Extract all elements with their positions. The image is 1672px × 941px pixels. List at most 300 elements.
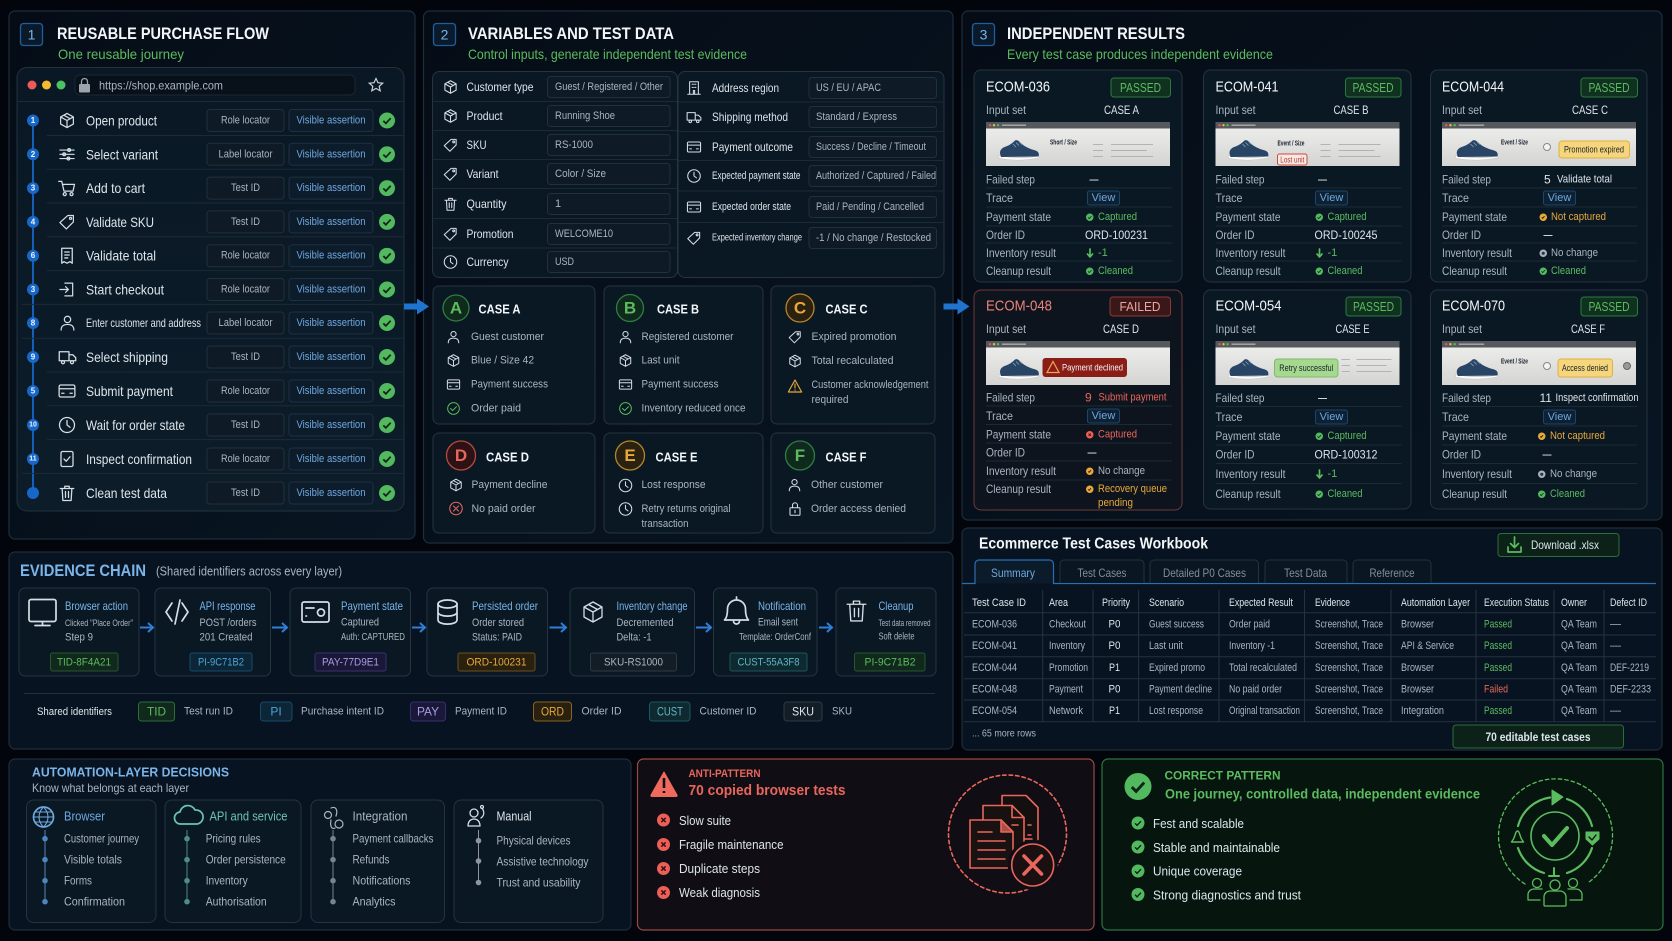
- result card ECOM-041: Failed step: [1216, 172, 1265, 186]
- case card A: Blue / Size 42: [471, 354, 534, 366]
- step 11 inspect confirmation: Visible assertion: [296, 453, 366, 465]
- evidence: api response: API response: [200, 599, 256, 613]
- panel: ecommerce test cases workbook: [962, 528, 1662, 750]
- layer: manual: Assistive technology: [496, 854, 588, 868]
- step 10 wait for order state: 10: [29, 422, 37, 428]
- table row ECOM-041: ECOM-041: [972, 640, 1017, 652]
- step 12 clean test data: Visible assertion: [296, 487, 366, 499]
- table row ECOM-048: Browser: [1401, 684, 1434, 696]
- case card A: A: [450, 298, 462, 318]
- variable: expected payment state: [688, 166, 936, 186]
- variable: variant: Variant: [466, 167, 499, 181]
- result card ECOM-044: Input set: [1442, 103, 1483, 117]
- evidence: cleanup: [836, 588, 936, 676]
- layer: browser: Forms: [64, 874, 92, 888]
- result card ECOM-044: —: [1544, 230, 1552, 240]
- result card ECOM-048 failed: Payment declined: [1062, 362, 1123, 372]
- case card A: [433, 286, 595, 424]
- variables table left: [432, 72, 678, 278]
- variable: expected payment state: Expected payment state: [712, 170, 800, 182]
- table row ECOM-054: Network: [1049, 705, 1083, 717]
- icon: copied documents with cross: [948, 775, 1066, 893]
- anti-pattern label: ANTI-PATTERN: [688, 768, 761, 780]
- result card ECOM-054: CASE E: [1336, 322, 1370, 336]
- table row ECOM-036: —: [1610, 618, 1621, 630]
- result card ECOM-036: Order ID: [986, 228, 1025, 242]
- variable: expected inventory change: Expected inventory change: [712, 232, 802, 244]
- table row ECOM-054: Original transaction: [1229, 705, 1300, 717]
- result card ECOM-054: Failed step: [1216, 391, 1265, 405]
- result card ECOM-036: Captured: [1098, 211, 1137, 223]
- workbook tabs: Reference: [1370, 566, 1415, 580]
- step 9 submit payment: Role locator: [221, 385, 270, 397]
- table row ECOM-041: Screenshot, Trace: [1315, 640, 1383, 652]
- subheading: One reusable journey: [58, 46, 184, 62]
- result card ECOM-044: Event / Size: [1501, 140, 1528, 146]
- result card ECOM-054: Captured: [1328, 430, 1366, 442]
- workbook tabs: Detailed P0 Cases: [1163, 566, 1246, 580]
- table row ECOM-048: DEF-2233: [1610, 684, 1651, 696]
- table header: Owner: [1561, 597, 1587, 609]
- result card ECOM-070: Trace: [1442, 410, 1469, 424]
- heading: reusable purchase flow: REUSABLE PURCHASE FLOW: [57, 24, 270, 43]
- result card ECOM-041: CASE B: [1334, 103, 1368, 117]
- step 8 select shipping: Visible assertion: [296, 351, 366, 363]
- result card ECOM-054: Trace: [1216, 410, 1243, 424]
- step 2 select variant: Label locator: [218, 148, 273, 160]
- layer: integration: Payment callbacks: [352, 832, 434, 846]
- evidence: api response: [155, 588, 270, 676]
- case card A: Guest customer: [471, 331, 544, 343]
- case card D: D: [455, 446, 467, 465]
- step 11 inspect confirmation: [27, 448, 395, 470]
- step 12 clean test data: [27, 482, 395, 504]
- variable: product: Product: [466, 109, 503, 123]
- result card ECOM-048 failed: Captured: [1098, 428, 1137, 440]
- step 9 submit payment: [27, 380, 395, 402]
- step 11 inspect confirmation: 11: [29, 456, 37, 462]
- variable: expected order state: Paid / Pending / Cancelled: [816, 201, 924, 213]
- case card E: Retry returns original: [642, 503, 730, 515]
- result card ECOM-070: Cleaned: [1550, 488, 1585, 500]
- step 2 select variant: 2: [31, 150, 36, 159]
- variable: variant: Color / Size: [555, 168, 606, 180]
- heading: independent results: INDEPENDENT RESULTS: [1007, 24, 1185, 43]
- case card B: CASE B: [657, 302, 699, 316]
- variable: address region: [688, 78, 936, 98]
- result card ECOM-048 failed: Input set: [986, 322, 1027, 336]
- step 10 wait for order state: Test ID: [231, 419, 260, 431]
- variable: sku: [444, 134, 670, 156]
- step 3 add to cart: [27, 177, 395, 199]
- result card ECOM-036: Trace: [986, 191, 1013, 205]
- evidence: persisted order: Persisted order: [472, 599, 538, 613]
- automation heading: AUTOMATION-LAYER DECISIONS: [32, 764, 229, 780]
- anti-pattern list: Duplicate steps: [679, 861, 760, 876]
- result card ECOM-036: Cleaned: [1098, 265, 1133, 277]
- case card E: [604, 433, 763, 533]
- result card ECOM-070: Cleanup result: [1442, 487, 1508, 501]
- evidence: cleanup: Cleanup: [878, 599, 914, 613]
- result card ECOM-041: Order ID: [1216, 228, 1255, 242]
- layer: browser: Confirmation: [64, 895, 125, 909]
- result card ECOM-054: PASSED: [1353, 299, 1394, 314]
- evidence: notification: CUST-55A3F8: [738, 656, 800, 668]
- evidence: inventory change: Delta: -1: [616, 632, 652, 644]
- table row ECOM-048: No paid order: [1229, 684, 1282, 696]
- step 11 inspect confirmation: Inspect confirmation: [86, 451, 192, 467]
- result card ECOM-048 failed: No change: [1098, 465, 1145, 477]
- evidence: browser action: TID-8F4A21: [57, 656, 111, 668]
- table row ECOM-041: [972, 640, 1621, 652]
- evidence: browser action: Clicked "Place Order": [65, 618, 133, 628]
- result card ECOM-041: Payment state: [1216, 210, 1281, 224]
- layer: browser: Browser: [64, 808, 106, 824]
- table row ECOM-044: DEF-2219: [1610, 662, 1649, 674]
- result card ECOM-070: No change: [1550, 468, 1597, 480]
- variable: payment outcome: Payment outcome: [712, 140, 793, 154]
- evidence: payment state: [290, 588, 410, 676]
- step 10 wait for order state: [27, 414, 395, 436]
- step 2 select variant: Visible assertion: [296, 148, 366, 160]
- table row ECOM-041: P0: [1108, 640, 1120, 652]
- step 1 open product: Open product: [86, 112, 157, 128]
- step 8 select shipping: [27, 346, 395, 368]
- table row ECOM-044: P1: [1109, 662, 1120, 674]
- shared identifiers legend: Order ID: [582, 706, 622, 718]
- table header: Scenario: [1149, 597, 1184, 609]
- step 4 validate sku: Test ID: [231, 216, 260, 228]
- result card ECOM-044: 5: [1544, 172, 1551, 186]
- variable: currency: USD: [555, 256, 574, 268]
- section number badge 2: [434, 24, 456, 46]
- table header: Expected Result: [1229, 597, 1293, 609]
- result card ECOM-036: ORD-100231: [1085, 228, 1148, 242]
- table row ECOM-041: Passed: [1484, 640, 1512, 652]
- table row ECOM-048: P0: [1108, 684, 1120, 696]
- result card ECOM-041: Lost unit: [1280, 156, 1305, 164]
- result card ECOM-036: CASE A: [1104, 103, 1139, 117]
- shared identifiers legend: CUST: [657, 704, 684, 718]
- evidence: browser action: [19, 588, 139, 676]
- step 4 validate sku: Visible assertion: [296, 216, 366, 228]
- variable: payment outcome: [687, 136, 936, 158]
- shared identifiers legend: ORD: [541, 704, 564, 718]
- result card ECOM-070: ECOM-070: [1442, 298, 1505, 314]
- table row ECOM-036: Checkout: [1049, 618, 1086, 630]
- step 3 add to cart: Test ID: [231, 182, 260, 194]
- evidence: inventory change: SKU-RS1000: [604, 656, 663, 668]
- result card ECOM-041: Event / Size: [1278, 140, 1305, 148]
- variable: product: [445, 106, 670, 126]
- case card B: [604, 286, 763, 424]
- layer: manual: Physical devices: [496, 834, 570, 848]
- step 4 validate sku: Validate SKU: [86, 214, 154, 230]
- heading: evidence chain: EVIDENCE CHAIN: [20, 561, 146, 580]
- step 6 start checkout: Role locator: [221, 284, 270, 296]
- result card ECOM-044: Payment state: [1442, 210, 1507, 224]
- shared identifiers legend: TID: [147, 704, 166, 718]
- evidence: notification: [714, 588, 817, 676]
- table row ECOM-044: [972, 662, 1649, 674]
- step 8 select shipping: Select shipping: [86, 349, 168, 365]
- section number badge 2: 2: [441, 26, 449, 42]
- table row ECOM-054: —: [1610, 705, 1621, 717]
- result card ECOM-036: Short / Size: [1050, 140, 1077, 146]
- layer: browser: [26, 800, 156, 922]
- result card ECOM-070: Order ID: [1442, 448, 1481, 462]
- layer: integration: Notifications: [352, 874, 410, 888]
- evidence: payment state: Auth: CAPTURED: [341, 632, 405, 643]
- section number badge 3: [972, 24, 994, 46]
- case card F: Other customer: [811, 479, 883, 491]
- shared identifiers legend: SKU: [792, 704, 814, 718]
- layer: api and service: [165, 800, 301, 922]
- result card ECOM-044: CASE C: [1572, 103, 1608, 117]
- table row ECOM-048: [972, 684, 1651, 696]
- step 7 enter customer and address: [27, 312, 395, 334]
- panel: evidence chain: [9, 552, 953, 749]
- layer: api and service: Order persistence: [206, 853, 286, 867]
- evidence: api response: 201 Created: [200, 632, 252, 644]
- variable: currency: [444, 252, 670, 272]
- result card ECOM-041: ORD-100245: [1314, 228, 1378, 242]
- shared identifiers legend: Test run ID: [184, 706, 233, 718]
- result card ECOM-048 failed: Order ID: [986, 446, 1025, 460]
- step 10 wait for order state: Wait for order state: [86, 417, 185, 433]
- editable test cases button: 70 editable test cases: [1486, 730, 1591, 744]
- result card ECOM-048 failed: Failed step: [986, 390, 1035, 404]
- step 6 start checkout: 3: [31, 285, 36, 294]
- result card ECOM-054: Inventory result: [1216, 467, 1286, 481]
- layer: api and service: Inventory: [206, 874, 248, 888]
- table row ECOM-054: Integration: [1401, 705, 1444, 717]
- result card ECOM-048 failed: 9: [1085, 390, 1092, 404]
- result card ECOM-041: Cleaned: [1328, 265, 1362, 277]
- anti-pattern headline: 70 copied browser tests: [688, 782, 846, 799]
- panel 3: independent results: [962, 11, 1662, 520]
- shared identifiers legend: Customer ID: [700, 706, 757, 718]
- table row ECOM-041: QA Team: [1561, 640, 1597, 652]
- step 3 add to cart: Visible assertion: [296, 182, 366, 194]
- table row ECOM-041: Inventory -1: [1229, 640, 1275, 652]
- workbook tabs: Test Data: [1284, 566, 1327, 580]
- result card ECOM-070: Access denied: [1562, 363, 1608, 373]
- table row ECOM-054: Lost response: [1149, 705, 1203, 717]
- table row ECOM-036: Guest success: [1149, 618, 1204, 630]
- download button: [1498, 534, 1619, 556]
- case card D: Payment decline: [472, 479, 548, 491]
- step 8 select shipping: Test ID: [231, 351, 260, 363]
- step 5 validate total: Role locator: [221, 250, 270, 262]
- variable: expected payment state: Authorized / Captured / Failed: [816, 170, 936, 182]
- variable: sku: RS-1000: [555, 139, 593, 151]
- result card ECOM-044: Trace: [1442, 191, 1469, 205]
- correct pattern list: Unique coverage: [1153, 864, 1242, 878]
- table row ECOM-048: Payment decline: [1149, 684, 1212, 696]
- result card ECOM-048 failed: ECOM-048: [986, 298, 1052, 314]
- result card ECOM-041: Cleanup result: [1216, 264, 1281, 278]
- step 5 validate total: 6: [31, 251, 36, 260]
- table row ECOM-048: Payment: [1049, 684, 1083, 696]
- evidence: persisted order: Status: PAID: [472, 632, 522, 644]
- table row ECOM-044: QA Team: [1561, 662, 1597, 674]
- step 4 validate sku: 4: [31, 217, 36, 226]
- result card ECOM-041: ECOM-041: [1216, 78, 1278, 96]
- case card F: Order access denied: [811, 503, 906, 515]
- shared identifiers legend: PAY: [417, 704, 439, 718]
- result card ECOM-044: Inventory result: [1442, 246, 1513, 260]
- section number badge 3: 3: [980, 26, 988, 42]
- table row ECOM-036: Order paid: [1229, 618, 1270, 630]
- table header: Automation Layer: [1401, 597, 1470, 609]
- layer: manual: Trust and usability: [496, 876, 580, 890]
- case card C: Expired promotion: [812, 331, 896, 343]
- result card ECOM-041: [1204, 70, 1411, 282]
- result card ECOM-044: Promotion expired: [1564, 144, 1624, 154]
- evidence: payment state: Payment state: [341, 599, 403, 613]
- workbook tabs: Test Cases: [1078, 566, 1126, 580]
- result card ECOM-070: Payment state: [1442, 429, 1507, 443]
- variable: address region: Address region: [712, 81, 779, 95]
- result card ECOM-041: Input set: [1216, 103, 1256, 117]
- result card ECOM-036: -1: [1098, 247, 1108, 259]
- result card ECOM-036: View: [1092, 192, 1115, 204]
- table row ECOM-036: [972, 618, 1621, 630]
- layer: browser: Visible totals: [64, 853, 122, 867]
- correct pattern list: Strong diagnostics and trust: [1153, 888, 1301, 902]
- editable test cases button: [1453, 725, 1624, 748]
- result card ECOM-048 failed: FAILED: [1120, 299, 1160, 314]
- browser window: [17, 68, 404, 511]
- correct pattern list: Fest and scalable: [1153, 816, 1244, 831]
- variable: customer type: Guest / Registered / Other: [555, 81, 663, 93]
- variable: shipping method: Standard / Express: [816, 111, 897, 123]
- result card ECOM-036: —: [1090, 174, 1098, 184]
- evidence: persisted order: [427, 588, 548, 676]
- browser chrome: https://shop.example.com: [99, 78, 223, 92]
- case card C: Total recalculated: [812, 355, 894, 367]
- result card ECOM-036: Cleanup result: [986, 264, 1052, 278]
- result card ECOM-036: Failed step: [986, 172, 1035, 186]
- case card B: Last unit: [642, 354, 680, 366]
- result card ECOM-044: View: [1548, 192, 1571, 204]
- icon: cycle with check and team: [1499, 779, 1613, 906]
- anti-pattern list: Slow suite: [679, 813, 731, 828]
- evidence: inventory change: [570, 588, 694, 676]
- evidence: notification: Email sent: [758, 616, 798, 628]
- case card D: CASE D: [486, 450, 529, 464]
- table row ECOM-044: Promotion: [1049, 662, 1088, 674]
- step 1 open product: [27, 110, 395, 132]
- result card ECOM-041: Inventory result: [1216, 246, 1286, 260]
- case card E: Lost response: [642, 479, 706, 491]
- variable: variant: [444, 164, 670, 184]
- result card ECOM-048 failed: Cleanup result: [986, 482, 1052, 496]
- result card ECOM-054: Payment state: [1216, 429, 1281, 443]
- result card ECOM-054: Cleaned: [1328, 488, 1362, 500]
- step 5 validate total: [27, 245, 395, 267]
- result card ECOM-048 failed: Submit payment: [1098, 392, 1166, 404]
- variable: expected inventory change: -1 / No change / Restocked: [816, 232, 931, 244]
- step 9 submit payment: Submit payment: [86, 383, 173, 399]
- more rows note: ... 65 more rows: [972, 728, 1036, 740]
- correct pattern label: CORRECT PATTERN: [1164, 768, 1280, 782]
- result card ECOM-041: Trace: [1216, 191, 1243, 205]
- evidence: persisted order: Order stored: [472, 617, 524, 629]
- variable: expected inventory change: [688, 228, 936, 248]
- result card ECOM-048 failed: Payment state: [986, 428, 1051, 442]
- result card ECOM-044: Cleanup result: [1442, 264, 1508, 278]
- step 1 open product: Role locator: [221, 114, 270, 126]
- evidence: api response: PI-9C71B2: [198, 656, 244, 668]
- case card E: E: [624, 446, 636, 465]
- step 6 start checkout: [27, 278, 395, 300]
- result card ECOM-036: Input set: [986, 103, 1027, 117]
- step 12 clean test data: Clean test data: [86, 485, 167, 501]
- table header: Evidence: [1315, 597, 1350, 609]
- layer: api and service: Authorisation: [206, 895, 267, 909]
- step 4 validate sku: [27, 211, 395, 233]
- case card F: [771, 433, 935, 533]
- case card D: No paid order: [472, 503, 536, 515]
- result card ECOM-036: Inventory result: [986, 246, 1057, 260]
- result card ECOM-048 failed: CASE D: [1103, 322, 1139, 336]
- result card ECOM-070: CASE F: [1571, 322, 1605, 336]
- step 1 open product: 1: [31, 116, 36, 125]
- icon: large check: [1124, 773, 1152, 800]
- step 12 clean test data: Test ID: [231, 487, 260, 499]
- shared identifiers legend: [37, 702, 852, 721]
- table row ECOM-041: Last unit: [1149, 640, 1183, 652]
- result card ECOM-070: 11: [1540, 391, 1552, 405]
- result card ECOM-048 failed: pending: [1098, 497, 1133, 509]
- step 7 enter customer and address: 8: [31, 318, 36, 328]
- result card ECOM-044: [1430, 70, 1647, 282]
- result card ECOM-070: Inventory result: [1442, 467, 1513, 481]
- case card E: transaction: [642, 518, 688, 530]
- result card ECOM-070: Event / Size: [1501, 358, 1528, 366]
- variable: payment outcome: Success / Decline / Timeout: [816, 141, 926, 153]
- result card ECOM-044: Order ID: [1442, 228, 1481, 242]
- evidence: browser action: Browser action: [65, 599, 128, 613]
- table row ECOM-036: Browser: [1401, 618, 1434, 630]
- result card ECOM-044: PASSED: [1588, 80, 1630, 95]
- result card ECOM-070: [1430, 290, 1647, 509]
- variable: currency: Currency: [466, 255, 508, 269]
- result card ECOM-070: Inspect confirmation: [1556, 392, 1638, 404]
- panel: automation-layer decisions: [9, 759, 631, 930]
- result card ECOM-048 failed: Recovery queue: [1098, 483, 1167, 495]
- evidence subtitle: (Shared identifiers across every layer): [156, 564, 342, 578]
- variable: expected order state: Expected order state: [712, 201, 791, 213]
- result card ECOM-048 failed: Trace: [986, 409, 1013, 423]
- variable: product: Running Shoe: [555, 110, 615, 122]
- layer: integration: Integration: [352, 808, 408, 824]
- result card ECOM-044: Validate total: [1557, 174, 1612, 186]
- layer: integration: Analytics: [352, 895, 396, 909]
- case card A: CASE A: [478, 302, 521, 316]
- table row ECOM-054: P1: [1109, 705, 1120, 717]
- variable: shipping method: Shipping method: [712, 110, 788, 124]
- result card ECOM-070: Failed step: [1442, 391, 1491, 405]
- table header: [972, 597, 1647, 609]
- table row ECOM-048: ECOM-048: [972, 684, 1017, 696]
- variable: sku: SKU: [466, 138, 486, 152]
- variable: quantity: 1: [555, 198, 561, 210]
- result card ECOM-054: Cleanup result: [1216, 487, 1281, 501]
- table header: Test Case ID: [972, 597, 1026, 609]
